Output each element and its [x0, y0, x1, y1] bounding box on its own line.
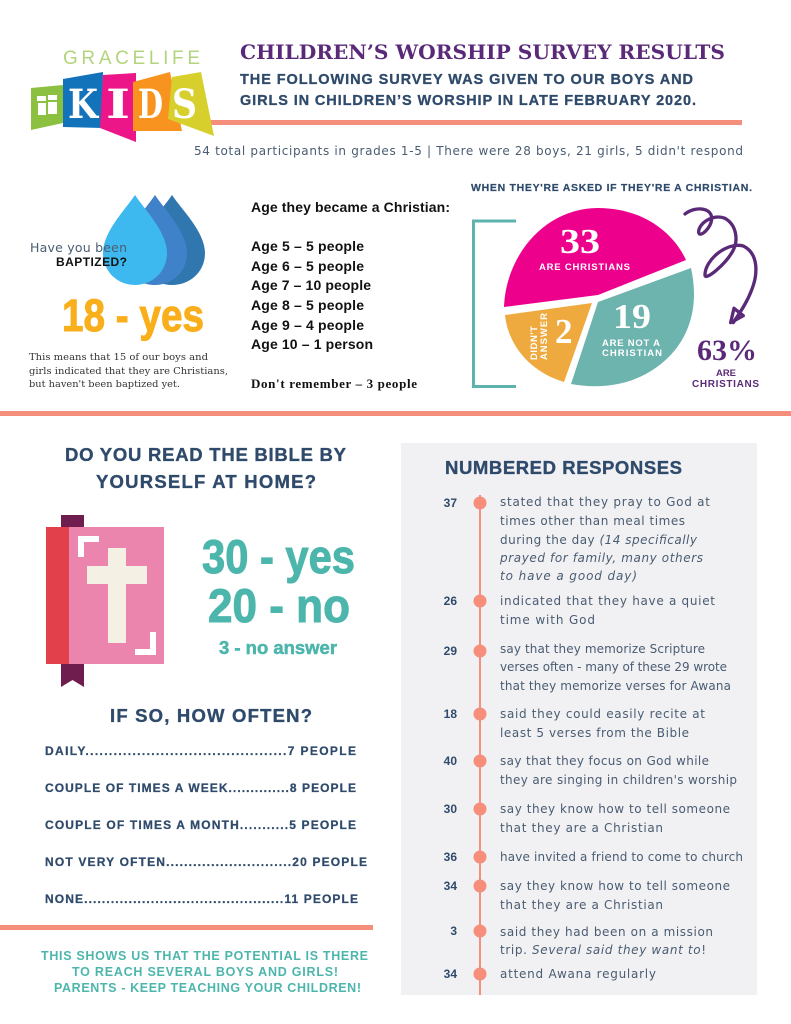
response: 34 [444, 879, 730, 912]
response: 3 [450, 924, 713, 957]
response: 18 [444, 707, 705, 740]
frequency list: COUPLE OF TIMES A WEEK..............8 PEOPLE [45, 781, 356, 795]
response: 40 [444, 754, 737, 787]
callout: 63 percent: 63% [697, 334, 757, 367]
Bible reading answers: 30 - yes [202, 530, 355, 583]
slice: are not a Christian: ARE NOT A [602, 338, 660, 349]
baptism note: This means that 15 of our boys and [29, 352, 208, 363]
panel: age they became a Christian: Age 5 – 5 people [251, 238, 364, 254]
response: 26: time with God [500, 613, 595, 627]
response: 30: say they know how to tell someone [500, 802, 730, 816]
response: 30: that they are a Christian [500, 821, 663, 835]
heading: how often: IF SO, HOW OFTEN? [110, 705, 312, 726]
baptism note: girls indicated that they are Christians, [29, 366, 228, 377]
panel: age they became a Christian: Age 6 – 5 people [251, 258, 364, 274]
response: 37: times other than meal times [500, 514, 685, 528]
slice: are Christians [504, 208, 686, 307]
heading: read the Bible: DO YOU READ THE BIBLE BY [65, 444, 347, 465]
heading: read the Bible [65, 444, 347, 492]
arrow: curly purple [685, 209, 756, 323]
logo: GraceLife Kids: K [68, 81, 99, 128]
section divider [0, 411, 791, 416]
closing message: PARENTS - KEEP TEACHING YOUR CHILDREN! [54, 981, 361, 995]
frequency list: NOT VERY OFTEN............................20 PEOPLE [45, 855, 367, 869]
response: 29: verses often - many of these 29 wrote [500, 660, 727, 674]
response: 29 [444, 642, 731, 693]
logo: GraceLife Kids: S [172, 81, 197, 128]
callout: 63 percent: ARE [716, 368, 736, 379]
response: 37 [444, 495, 710, 583]
response: 26: indicated that they have a quiet [500, 594, 715, 608]
slice: didn't answer: 2 [555, 312, 572, 351]
heading: read the Bible: YOURSELF AT HOME? [96, 471, 316, 492]
response: 29: 29 [444, 644, 457, 658]
baptism count: 18 - yes [62, 290, 204, 341]
slice: are Christians: 33 [560, 222, 600, 261]
icon: water drops [103, 195, 205, 285]
response: 18: least 5 verses from the Bible [500, 726, 689, 740]
frequency list: NONE.............................................11 PEOPLE [45, 892, 358, 906]
baptism question [30, 240, 127, 269]
slice: are not a Christian [571, 268, 694, 386]
panel: age they became a Christian: Age 7 – 10 people [251, 277, 371, 293]
panel: age they became a Christian: Don't remember – 3 people [251, 376, 417, 391]
response: 29: say that they memorize Scripture [500, 642, 705, 656]
slice: didn't answer: DIDN'T [529, 326, 540, 360]
response: 34 Awana: attend Awana regularly [500, 967, 656, 981]
response: 34: 34 [444, 879, 457, 893]
response: 29: that they memorize verses for Awana [500, 679, 731, 693]
response: 37: during the day (14 specifically [500, 533, 698, 547]
closing message [41, 949, 368, 995]
closing message: TO REACH SEVERAL BOYS AND GIRLS! [72, 965, 338, 979]
logo: GraceLife Kids: I [106, 81, 130, 128]
slice: didn't answer [505, 303, 592, 382]
subtitle: THE FOLLOWING SURVEY WAS GIVEN TO OUR BOYS AND [240, 72, 693, 88]
response: 37: 37 [444, 496, 457, 510]
response: 40: say that they focus on God while [500, 754, 709, 768]
logo: GraceLife Kids: GRACELIFE [63, 48, 200, 69]
heading: numbered responses: NUMBERED RESPONSES [445, 457, 682, 478]
Bible reading answers [202, 530, 355, 658]
icon: Bible [46, 515, 164, 687]
slice: are not a Christian: CHRISTIAN [602, 348, 662, 359]
callout: 63 percent: CHRISTIANS [692, 379, 759, 390]
response: 36: 36 [444, 850, 457, 864]
response: 34: say they know how to tell someone [500, 879, 730, 893]
response: 18: 18 [444, 707, 457, 721]
response: 37: stated that they pray to God at [500, 495, 710, 509]
response: 30: 30 [444, 802, 457, 816]
subtitle [240, 72, 696, 109]
callout: 63 percent [692, 334, 759, 390]
logo: GraceLife Kids: D [138, 81, 163, 128]
panel: numbered responses [401, 443, 757, 995]
response: 3: said they had been on a mission [500, 925, 713, 939]
response: 30 [444, 802, 730, 835]
response: 3: trip. Several said they want to! [500, 943, 706, 957]
baptism note: but haven't been baptized yet. [29, 379, 180, 390]
response: 34: that they are a Christian [500, 898, 663, 912]
response: 36: have invited a friend to come to church [500, 850, 743, 864]
panel: age they became a Christian: Age 8 – 5 people [251, 297, 364, 313]
participants summary: 54 total participants in grades 1-5 | There were 28 boys, 21 girls, 5 didn't respond [194, 144, 743, 158]
panel: age they became a Christian [251, 199, 450, 391]
panel: baptism [29, 195, 228, 390]
slice: didn't answer: ANSWER [539, 313, 550, 360]
timeline [474, 495, 486, 995]
Bible reading answers: 3 - no answer [219, 638, 337, 658]
bracket [474, 221, 516, 386]
baptism question: BAPTIZED? [56, 255, 127, 269]
pie chart [504, 208, 694, 386]
response: 34 Awana: 34 [444, 967, 457, 981]
panel: age they became a Christian: Age they became a Christian: [251, 199, 450, 215]
pie heading: WHEN THEY'RE ASKED IF THEY'RE A CHRISTIAN. [471, 182, 752, 194]
slice: are not a Christian: 19 [613, 297, 651, 336]
response: 40: 40 [444, 754, 457, 768]
frequency list [45, 744, 367, 906]
subtitle: GIRLS IN CHILDREN’S WORSHIP IN LATE FEBRUARY 2020. [240, 93, 696, 109]
frequency list: DAILY...........................................7 PEOPLE [45, 744, 356, 758]
baptism note [29, 352, 228, 390]
logo: GraceLife Kids [31, 48, 214, 142]
response: 26: 26 [444, 594, 457, 608]
closing message: THIS SHOWS US THAT THE POTENTIAL IS THERE [41, 949, 368, 963]
response: 18: said they could easily recite at [500, 707, 705, 721]
Bible reading answers: 20 - no [208, 579, 350, 632]
baptism question: Have you been [30, 240, 127, 255]
response: 37: to have a good day) [500, 569, 637, 583]
response: 37: prayed for family, many others [499, 551, 703, 565]
panel: age they became a Christian: Age 9 – 4 people [251, 317, 364, 333]
left divider [0, 925, 373, 930]
frequency list: COUPLE OF TIMES A MONTH...........5 PEOPLE [45, 818, 356, 832]
response: 40: they are singing in children's worship [500, 773, 737, 787]
panel: age they became a Christian: Age 10 – 1 person [251, 336, 373, 352]
response: 3: 3 [450, 924, 457, 938]
header line [210, 120, 742, 125]
title: CHILDREN’S WORSHIP SURVEY RESULTS [240, 40, 725, 64]
slice: are Christians: ARE CHRISTIANS [539, 262, 630, 273]
response: 26 [444, 594, 715, 627]
